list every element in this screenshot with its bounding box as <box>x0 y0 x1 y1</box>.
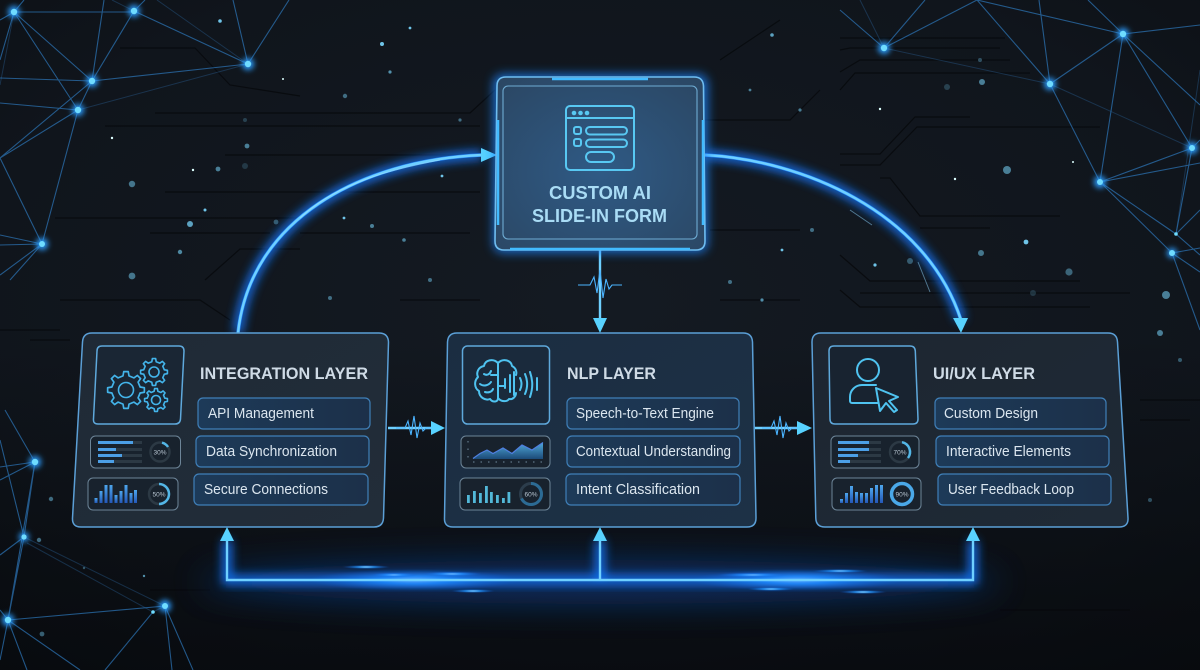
list item: speech-to-text engine <box>567 398 739 429</box>
icon: user with cursor <box>829 346 918 424</box>
mini chart: bar chart with 50% gauge: 50% <box>152 492 166 498</box>
heading: NLP layer: NLP LAYER <box>567 364 656 383</box>
heading: custom AI slide-in form <box>532 183 667 226</box>
network: bottom left <box>0 410 193 670</box>
panel: UI/UX layer <box>812 333 1128 527</box>
heading: UI/UX layer: UI/UX LAYER <box>933 364 1035 383</box>
network: top left <box>0 0 289 280</box>
mini chart: bar chart with 60% gauge <box>460 478 550 510</box>
heading: integration layer: INTEGRATION LAYER <box>200 364 368 383</box>
mini chart: progress bars with 30% gauge: 30% <box>153 450 167 456</box>
list item: interactive elements <box>936 436 1109 467</box>
list item: contextual understanding: Contextual Understanding <box>576 444 731 460</box>
arrow: integration layer to custom form <box>238 148 497 333</box>
mini chart: bar chart with 90% gauge: 90% <box>895 492 909 498</box>
arrow: custom form to UI/UX layer <box>705 155 968 333</box>
mini chart: progress bars with 70% gauge: 70% <box>893 450 907 456</box>
list item: API management <box>198 398 370 429</box>
mini chart: bar chart with 60% gauge: 60% <box>524 492 538 498</box>
list item: custom design <box>935 398 1106 429</box>
list item: API management: API Management <box>208 406 314 422</box>
mini chart: bar chart with 90% gauge <box>832 478 921 510</box>
icon: brain with sound waves <box>462 346 550 424</box>
panel: custom AI slide-in form <box>493 74 708 253</box>
list item: intent classification <box>566 474 740 505</box>
list item: speech-to-text engine: Speech-to-Text Engine <box>576 406 714 422</box>
mini chart: area chart <box>461 436 550 468</box>
list item: custom design: Custom Design <box>944 406 1038 422</box>
mini chart: progress bars with 70% gauge <box>831 436 919 468</box>
network: top right <box>840 0 1200 330</box>
list item: user feedback loop <box>938 474 1111 505</box>
arrow: integration layer to NLP layer <box>388 416 445 438</box>
icon: form window <box>566 106 634 170</box>
list item: secure connections: Secure Connections <box>204 482 328 498</box>
panel: NLP layer <box>444 333 756 527</box>
bottom glow <box>200 560 1000 604</box>
mini chart: bar chart with 50% gauge <box>88 478 178 510</box>
list item: secure connections <box>194 474 368 505</box>
icon: gears <box>93 346 184 424</box>
heading: custom AI slide-in form: SLIDE-IN FORM <box>532 206 667 226</box>
list item: contextual understanding <box>567 436 740 467</box>
arrow: custom form to NLP layer <box>578 250 622 333</box>
list item: data synchronization: Data Synchronization <box>206 444 337 460</box>
heading: custom AI slide-in form: CUSTOM AI <box>549 183 651 203</box>
panel: integration layer <box>72 333 388 527</box>
feedback loop: bottom connector with three arrows <box>220 527 980 580</box>
list item: interactive elements: Interactive Elements <box>946 444 1071 460</box>
list item: user feedback loop: User Feedback Loop <box>948 482 1074 498</box>
arrow: NLP layer to UI/UX layer <box>752 416 812 438</box>
list item: intent classification: Intent Classification <box>576 482 700 498</box>
list item: data synchronization <box>196 436 369 467</box>
mini chart: progress bars with 30% gauge <box>90 436 180 468</box>
